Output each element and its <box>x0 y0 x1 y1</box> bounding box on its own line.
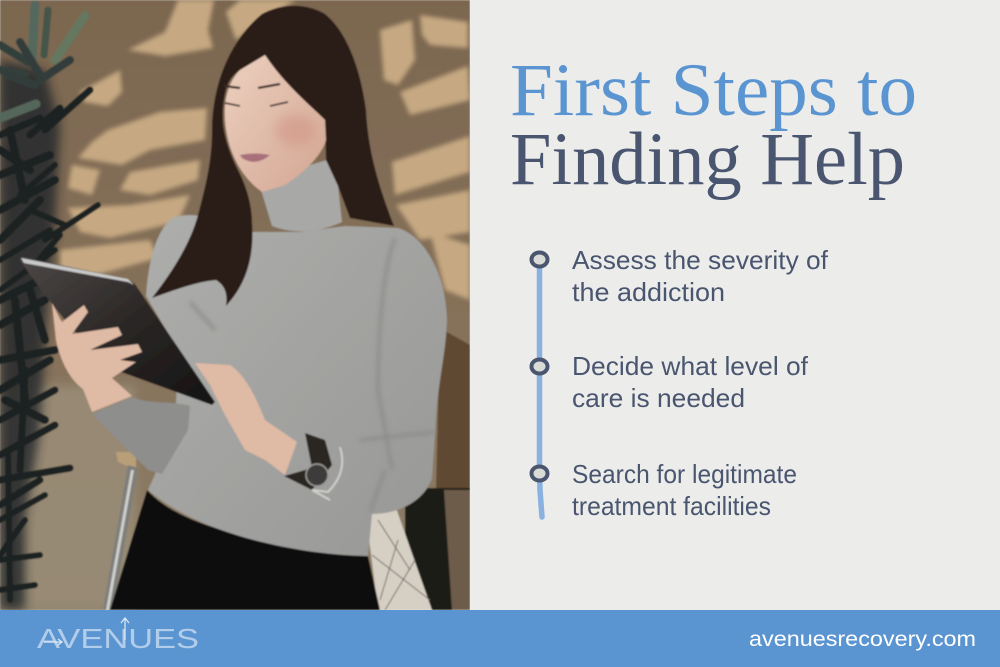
step 3 text: treatment facilities <box>572 491 771 521</box>
photo: woman using a tablet <box>0 0 470 610</box>
step 2 text: Decide what level of <box>572 351 809 381</box>
step 1 text: Assess the severity of <box>572 245 829 275</box>
black trousers <box>110 490 380 610</box>
plant leaves <box>0 5 98 610</box>
logo: Avenues: AVENUES <box>37 623 199 654</box>
table and dark stool area <box>405 328 470 610</box>
face and neck <box>225 55 326 192</box>
right hand on the screen <box>195 363 297 475</box>
timeline: steps <box>532 245 829 521</box>
long dark hair <box>152 6 394 306</box>
left sleeve <box>92 397 190 474</box>
panel: bottom brand bar <box>0 610 1000 667</box>
step 3 marker <box>532 466 548 480</box>
timeline line <box>540 262 542 517</box>
turtleneck collar <box>258 160 342 231</box>
step 1 marker <box>532 252 548 266</box>
step 2 marker <box>532 360 548 374</box>
step 3 text <box>572 459 797 521</box>
title: First Steps to <box>510 49 917 132</box>
website url: avenuesrecovery.com <box>749 627 976 651</box>
left hand holding the tablet <box>52 303 142 412</box>
facial features <box>224 84 315 162</box>
title <box>510 49 917 201</box>
tablet <box>20 257 215 405</box>
chair leg <box>103 452 138 610</box>
wall: distressed plaster patches <box>60 0 470 300</box>
cushion with tile pattern <box>366 505 432 610</box>
title: Finding Help <box>510 118 905 201</box>
sweater folds <box>190 238 435 512</box>
step 2 text: care is needed <box>572 383 745 413</box>
wall: lower left <box>20 385 135 610</box>
grey turtleneck sweater <box>92 160 447 556</box>
step 3 text: Search for legitimate <box>572 459 797 489</box>
wristwatch and bracelet <box>284 433 342 500</box>
step 2 text <box>572 351 809 413</box>
step 1 text <box>572 245 829 307</box>
step 1 text: the addiction <box>572 277 725 307</box>
